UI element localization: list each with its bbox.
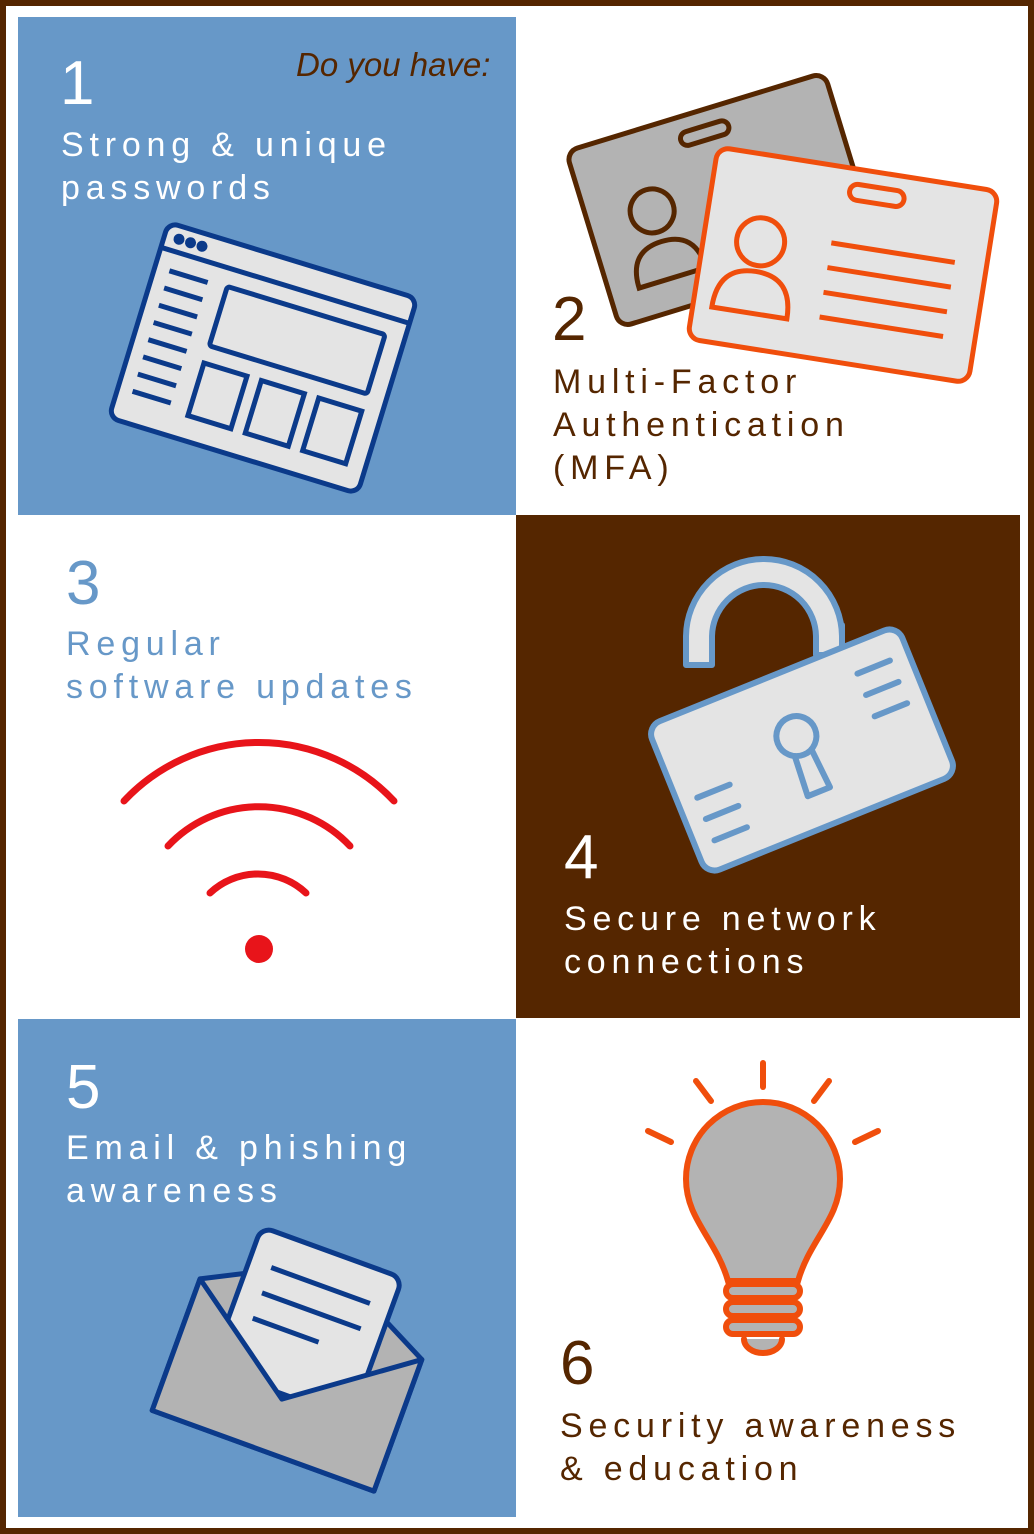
label 4: connections: [564, 943, 809, 981]
icon: browser window: [108, 222, 418, 494]
panel 6: education: [560, 1060, 961, 1488]
icon: wifi: [120, 739, 398, 963]
label 1: passwords: [61, 169, 276, 207]
panel 4: network: [516, 515, 1020, 1018]
number 3: 3: [66, 549, 100, 618]
number 6: 6: [560, 1329, 594, 1398]
label 1: Strong & unique: [61, 126, 392, 164]
intro text: Do you have:: [296, 46, 490, 83]
label 3: software updates: [66, 668, 418, 706]
label 2: [553, 363, 850, 487]
label 5: Email & phishing: [66, 1129, 412, 1167]
panel 1: passwords: [18, 17, 516, 515]
label 2: Multi-Factor: [553, 363, 802, 401]
label 6: Security awareness: [560, 1407, 961, 1445]
label 6: [560, 1407, 961, 1488]
label 4: [564, 900, 881, 981]
label 3: Regular: [66, 625, 226, 663]
panel 2: MFA: [552, 73, 1000, 487]
label 2: Authentication: [553, 406, 850, 444]
icon: lightbulb: [645, 1060, 881, 1356]
icon: padlock: [648, 556, 956, 874]
label 5: [66, 1129, 412, 1210]
number 2: 2: [552, 285, 586, 354]
number 4: 4: [564, 823, 598, 892]
shackle: [686, 559, 842, 665]
label 3: [66, 625, 418, 706]
panel 3: updates: [66, 549, 418, 963]
label 4: Secure network: [564, 900, 881, 938]
number 1: 1: [60, 49, 94, 118]
panel 5: email: [18, 1019, 516, 1517]
icon: envelope: [150, 1228, 424, 1494]
icon: ID cards: [566, 73, 1000, 384]
label 5: awareness: [66, 1172, 283, 1210]
number 5: 5: [66, 1053, 100, 1122]
label 1: [61, 126, 392, 207]
label 6: & education: [560, 1450, 803, 1488]
label 2: (MFA): [553, 449, 675, 487]
